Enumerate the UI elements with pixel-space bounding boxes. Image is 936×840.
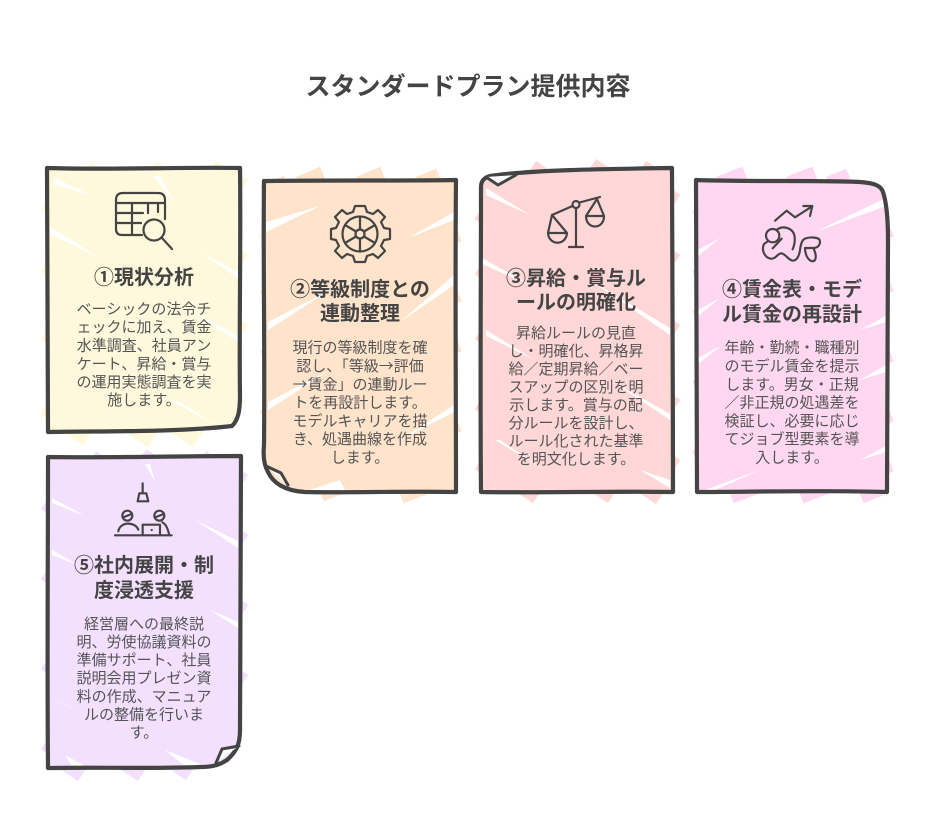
- body text: します。: [331, 450, 389, 466]
- panel border: [696, 180, 888, 492]
- body text: 昇給ルールの見直: [516, 325, 636, 342]
- body text: 水準調査、社員アン: [77, 338, 211, 354]
- icon: upward arrow and clasped hands: [763, 206, 820, 261]
- body text: す。: [130, 724, 158, 742]
- heading: [74, 554, 214, 602]
- body text: [76, 301, 212, 409]
- heading: 連動整理: [320, 301, 400, 325]
- body text: ェックに加え、賃金: [76, 319, 212, 336]
- body text: →賃金」の連動ルー: [292, 374, 428, 394]
- body text: モデルキャリアを描: [292, 412, 428, 430]
- body text: 検証し、必要に応じ: [724, 413, 860, 430]
- paper curl: [266, 466, 288, 485]
- panel fill: yellow hachure: [46, 168, 242, 438]
- icon: scales: [548, 197, 604, 247]
- paper curl: [486, 175, 516, 185]
- body text: 示します。賞与の配: [509, 397, 643, 414]
- body text: ケート、昇給・賞与: [77, 356, 211, 373]
- heading: ⑤社内展開・制: [74, 554, 214, 577]
- body text: ベーシックの法令チ: [77, 301, 211, 318]
- body text: 認し、「等級→評価: [296, 355, 424, 376]
- body text: 年齢・勤続・職種別: [724, 340, 860, 356]
- body text: てジョブ型要素を導: [724, 430, 860, 448]
- panel border: [48, 456, 241, 768]
- heading: [722, 277, 862, 326]
- panel fill: orange hachure: [264, 176, 458, 494]
- body text: 分ルールを設計し、: [508, 415, 644, 432]
- body text: し・明確化、昇格昇: [508, 343, 644, 360]
- icon: two people at a laptop under a lamp: [115, 483, 172, 535]
- icon: table with magnifier: [116, 193, 172, 249]
- heading: [506, 267, 646, 314]
- panel: 等級制度との連動整理: [264, 176, 458, 494]
- heading: ル賃金の再設計: [722, 303, 862, 326]
- heading: ④賃金表・モデ: [722, 277, 862, 301]
- panel: 社内展開・制度浸透支援: [47, 456, 242, 772]
- panel fill: pink hachure: [696, 176, 890, 494]
- body text: ルール化された基準: [508, 433, 644, 450]
- body text: [724, 340, 860, 466]
- panel: 昇給・賞与ルールの明確化: [481, 168, 674, 495]
- heading: ールの明確化: [516, 291, 636, 314]
- heading: [290, 278, 430, 325]
- body text: トを再設計します。: [293, 394, 427, 412]
- body text: します。男女・正規: [725, 376, 859, 394]
- heading: 度浸透支援: [94, 579, 194, 602]
- paper curl: [216, 746, 239, 763]
- panel border: [264, 180, 456, 492]
- body text: 料の作成、マニュア: [77, 688, 211, 706]
- panel border: [47, 168, 240, 432]
- body text: の運用実態調査を実: [76, 374, 212, 391]
- panel fill: purple hachure: [47, 456, 242, 772]
- body text: のモデル賃金を提示: [724, 357, 860, 375]
- body text: 給／定期昇給／ベー: [508, 361, 644, 378]
- body text: スアップの区別を明: [508, 379, 644, 396]
- body text: き、処遇曲線を作成: [293, 431, 427, 448]
- body text: [76, 616, 212, 742]
- heading: ②等級制度との: [290, 278, 430, 301]
- body text: 現行の等級制度を確: [292, 338, 428, 356]
- body text: ／非正規の処遇差を: [724, 394, 860, 412]
- heading: ③昇給・賞与ル: [506, 267, 646, 290]
- body text: ルの整備を行いま: [84, 706, 204, 724]
- body text: 明、労使協議資料の: [76, 633, 212, 651]
- heading: ①現状分析: [94, 266, 194, 289]
- body text: 準備サポート、社員: [77, 652, 211, 669]
- panel fill: red hachure: [481, 168, 674, 495]
- body text: [292, 338, 428, 466]
- panel: 現状分析: [46, 168, 242, 438]
- body text: [508, 325, 644, 468]
- icon: gear: [331, 206, 390, 262]
- panel: 賃金表・モデル賃金の再設計: [696, 176, 890, 494]
- body text: 施します。: [107, 392, 181, 409]
- body text: 経営層への最終説: [84, 616, 204, 633]
- body text: を明文化します。: [517, 451, 635, 468]
- panel border: [481, 168, 673, 492]
- body text: 説明会用プレゼン資: [76, 670, 212, 687]
- title: スタンダードプラン提供内容: [305, 72, 631, 101]
- body text: 入します。: [755, 450, 829, 466]
